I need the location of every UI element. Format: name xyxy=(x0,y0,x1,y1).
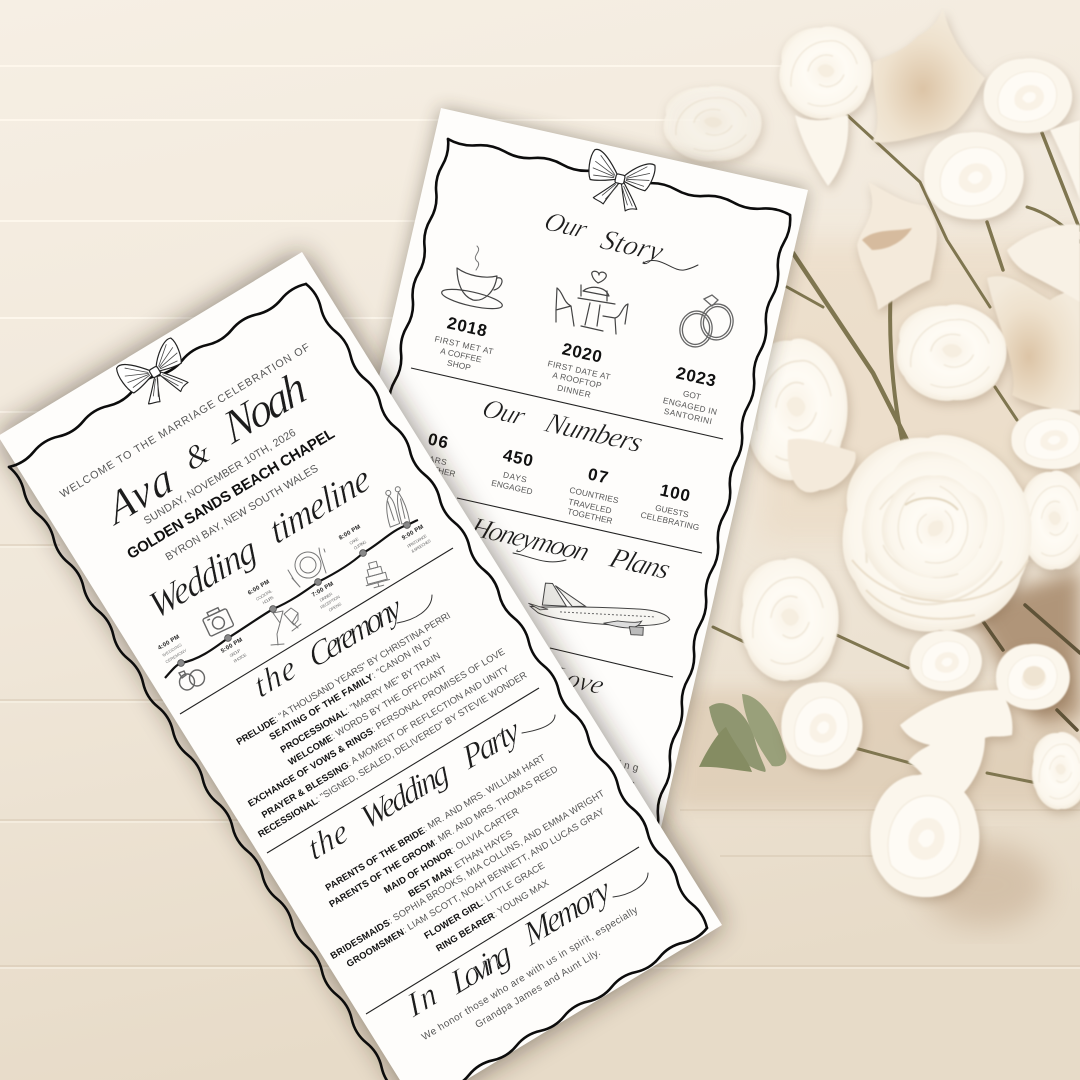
wavy border xyxy=(9,284,707,1080)
ceremony programme list: PRELUDE: "A THOUSAND YEARS" BY CHRISTINA PERRI xyxy=(234,609,452,747)
story item 2018: FIRST MET AT xyxy=(434,334,494,356)
timeline label 6:00 PM xyxy=(247,579,275,605)
right card: our story xyxy=(293,108,808,870)
timeline label 8:00 PM: CAKE xyxy=(348,536,360,546)
timeline label 5:00 PM: GROUP xyxy=(229,648,242,658)
icon: bow xyxy=(581,148,657,215)
ceremony programme list: RECESSIONAL: "SIGNED, SEALED, DELIVERED" BY STEVIE WONDER xyxy=(255,669,529,839)
text: blessing line: Blessing xyxy=(577,750,639,774)
flower stems xyxy=(713,115,1080,783)
stat: 07 countries: COUNTRIES xyxy=(569,485,620,505)
stat: 07 countries: TRAVELED xyxy=(567,496,613,516)
text: thanks line: Thanks xyxy=(588,770,636,790)
heading: the wedding party: Party xyxy=(457,711,524,778)
heading: our numbers: Numbers xyxy=(540,407,647,459)
story item 2023: SANTORINI xyxy=(663,406,713,426)
rose xyxy=(1020,470,1080,570)
timeline label 5:00 PM: 5:00 PM xyxy=(220,637,244,655)
orchid centre xyxy=(862,228,912,250)
stat: 07 countries: TOGETHER xyxy=(566,506,614,526)
heading: the ceremony: the xyxy=(249,648,301,706)
card paper xyxy=(0,252,722,1080)
timeline label 8:00 PM xyxy=(338,524,367,551)
timeline label 9:00 PM: FIRST DANCE xyxy=(406,533,428,549)
timeline label 8:00 PM: 8:00 PM xyxy=(338,524,362,542)
heading: wedding timeline: Wedding xyxy=(144,528,262,628)
timeline label 7:00 PM: DINNER xyxy=(319,591,333,603)
text: welcome line: WELCOME TO THE MARRIAGE CELEBRATION OF xyxy=(58,341,312,501)
ceremony programme list: PROCESSIONAL: "MARRY ME" BY TRAIN xyxy=(278,650,442,754)
heading: our numbers: Our xyxy=(478,393,530,431)
stat: 450 days engaged: ENGAGED xyxy=(490,478,534,496)
timeline label 6:00 PM: HOURS xyxy=(262,595,275,605)
timeline label 7:00 PM: RECEPTION xyxy=(319,594,341,610)
timeline label 5:00 PM: PHOTOS xyxy=(233,652,247,664)
shadow beneath lower rose xyxy=(923,843,1047,927)
stat: 100 guests xyxy=(640,480,700,532)
heading: our numbers xyxy=(478,393,647,459)
stat: 06 years together: TOGETHER xyxy=(409,459,457,479)
wedding party list: GROOMSMEN: LIAM SCOTT, NOAH BENNETT, AND LUCAS GRAY xyxy=(344,805,607,969)
stat: 450 days engaged: DAYS xyxy=(502,470,528,485)
stat: 100 guests: GUESTS xyxy=(654,502,690,520)
star petal flower xyxy=(900,690,1012,808)
story item 2020: FIRST DATE AT xyxy=(547,358,611,382)
heading: in loving memory xyxy=(402,870,648,1026)
stat: 450 days engaged xyxy=(490,445,535,496)
heading: the ceremony: Ceremony xyxy=(304,588,406,676)
white petal far right xyxy=(1050,120,1080,200)
timeline label 9:00 PM: 9:00 PM xyxy=(401,524,425,542)
card paper xyxy=(293,108,808,832)
wavy border xyxy=(360,139,790,870)
rose xyxy=(910,630,982,691)
heading: our story: Our xyxy=(540,206,592,244)
icon: engagement rings xyxy=(676,295,737,350)
timeline label 4:00 PM: CEREMONY xyxy=(164,648,188,664)
dried coral flower right xyxy=(987,276,1080,410)
heading: in loving memory: Loving xyxy=(445,934,516,1003)
stat: 07 countries xyxy=(566,465,620,526)
wedding party list: BRIDESMAIDS: SOPHIA BROOKS, MIA COLLINS, AND EMMA WRIGHT xyxy=(328,787,606,961)
timeline label 4:00 PM xyxy=(157,634,188,664)
rose xyxy=(781,682,863,769)
wedding party list: RING BEARER: YOUNG MAX xyxy=(433,876,551,953)
timeline label 4:00 PM: 4:00 PM xyxy=(157,634,181,652)
memorial text: Grandpa James and Aunt Lily. xyxy=(473,947,603,1031)
story item 2018 xyxy=(434,313,494,373)
story item 2020: 2020 xyxy=(560,339,604,367)
wedding party list: PARENTS OF THE BRIDE: MR. AND MRS. WILLIAM HART xyxy=(323,751,547,892)
heading: our story: Story xyxy=(596,224,668,268)
icon: wedding rings xyxy=(179,670,204,690)
timeline label 6:00 PM: 6:00 PM xyxy=(247,579,271,597)
icon: plate and cutlery xyxy=(288,547,326,587)
heading: love: Love xyxy=(546,660,609,700)
stat: 06 years together: YEARS xyxy=(416,451,448,467)
story item 2020: DINNER xyxy=(556,382,592,400)
heading: honeymoon plans: Plans xyxy=(604,542,675,586)
couple names xyxy=(98,361,313,536)
stat: 06 years together xyxy=(409,430,457,479)
small flower beside card xyxy=(788,439,856,493)
text: venue: GOLDEN SANDS BEACH CHAPEL xyxy=(124,425,338,563)
heading: the ceremony xyxy=(249,588,432,706)
icon: airplane xyxy=(527,582,671,637)
story item 2023: 2023 xyxy=(674,363,718,391)
wedding party list: FLOWER GIRL: LITTLE GRACE xyxy=(422,859,546,941)
story item 2023: GOT xyxy=(682,388,702,402)
timeline label 6:00 PM: COCKTAIL xyxy=(255,588,274,602)
icon: champagne glasses xyxy=(271,608,301,645)
rose xyxy=(1011,408,1080,469)
wedding party list: MAID OF HONOR: OLIVIA CARTER xyxy=(381,805,521,895)
stat: 06 years together: 06 xyxy=(426,430,450,452)
ceremony programme list: EXCHANGE OF VOWS & RINGS: PERSONAL PROMISES OF LOVE xyxy=(245,646,507,808)
couple names: Noah xyxy=(216,361,313,456)
white petal right xyxy=(1007,224,1080,302)
left card: wedding programme xyxy=(0,252,722,1080)
dark gap beneath big rose xyxy=(965,570,1080,725)
timeline label 7:00 PM: OPENS xyxy=(328,601,342,613)
heading: the wedding party xyxy=(303,711,555,868)
rose xyxy=(897,304,1007,401)
heading: the wedding party: the xyxy=(303,812,353,868)
icon: wedding cake xyxy=(361,559,390,590)
stat: 100 guests: 100 xyxy=(658,480,692,506)
heading: wedding timeline: timeline xyxy=(265,457,375,553)
rose xyxy=(744,339,848,480)
timeline label 8:00 PM: CUTTING xyxy=(353,539,367,551)
story item 2020: A ROOFTOP xyxy=(552,370,603,390)
wedding party list: PARENTS OF THE GROOM: MR. AND MRS. THOMAS REED xyxy=(327,763,560,909)
story item 2018: SHOP xyxy=(446,358,472,373)
rose xyxy=(984,58,1072,133)
story item 2020 xyxy=(547,339,611,400)
heading: honeymoon plans xyxy=(465,512,675,586)
ceremony programme list xyxy=(234,609,529,839)
icon: bow xyxy=(114,335,198,415)
timeline label 9:00 PM: & SPEECHES xyxy=(410,538,432,554)
timeline label 7:00 PM: 7:00 PM xyxy=(311,581,335,599)
ceremony programme list: SEATING OF THE FAMILY: "CANON IN D" xyxy=(267,634,435,742)
rose xyxy=(663,86,762,162)
timeline label 7:00 PM xyxy=(311,581,342,613)
rose xyxy=(924,132,1024,219)
story item 2023: ENGAGED IN xyxy=(662,395,718,417)
rose xyxy=(779,26,872,119)
heading: the wedding party: Wedding xyxy=(356,752,454,838)
couple names: Ava xyxy=(98,451,179,536)
stat: 07 countries: 07 xyxy=(586,465,610,487)
rose xyxy=(740,558,839,681)
flowers xyxy=(663,8,1080,897)
text: location: BYRON BAY, NEW SOUTH WALES xyxy=(163,463,321,563)
petal under top rose xyxy=(795,115,848,186)
heading: in loving memory: Memory xyxy=(518,870,615,955)
wedding party list: BEST MAN: ETHAN HAYES xyxy=(406,827,514,899)
heading: in loving memory: In xyxy=(402,975,442,1026)
timeline label 5:00 PM xyxy=(220,637,247,664)
ceremony programme list: PRAYER & BLESSING: A MOMENT OF REFLECTION AND UNITY xyxy=(259,662,511,820)
story item 2018: A COFFEE xyxy=(439,346,483,365)
dried coral flower top xyxy=(872,8,985,143)
timeline label 9:00 PM xyxy=(401,524,432,554)
timeline label 4:00 PM: WEDDING xyxy=(161,642,183,658)
story item 2023 xyxy=(662,363,718,426)
icon: coffee cup xyxy=(440,246,504,313)
memorial text: We honor those who are with us in spirit, especially xyxy=(420,905,640,1043)
ceremony programme list: WELCOME: WORDS BY THE OFFICIANT xyxy=(286,663,448,767)
rose with deep centre xyxy=(996,644,1070,710)
orchid flower xyxy=(857,182,937,310)
icon: camera xyxy=(201,605,234,637)
stat: 100 guests: CELEBRATING xyxy=(640,510,700,532)
timeline line xyxy=(165,520,418,678)
story item 2018: 2018 xyxy=(445,313,489,341)
left card shadow xyxy=(0,252,722,1080)
rose xyxy=(870,774,979,897)
heading: honeymoon plans: Honeymoon xyxy=(465,512,594,568)
text: date: SUNDAY, NOVEMBER 10TH, 2026 xyxy=(142,427,298,527)
couple names: & xyxy=(179,432,215,478)
heading: wedding timeline xyxy=(144,457,375,628)
icon: bride and groom xyxy=(383,486,410,527)
stat: 450 days engaged: 450 xyxy=(501,445,535,471)
big rose xyxy=(834,427,1034,632)
olive leaves xyxy=(699,694,786,772)
rose xyxy=(1032,732,1080,809)
right card shadow xyxy=(293,108,808,832)
heading: our story xyxy=(540,206,698,270)
icon: dinner table xyxy=(556,271,628,334)
